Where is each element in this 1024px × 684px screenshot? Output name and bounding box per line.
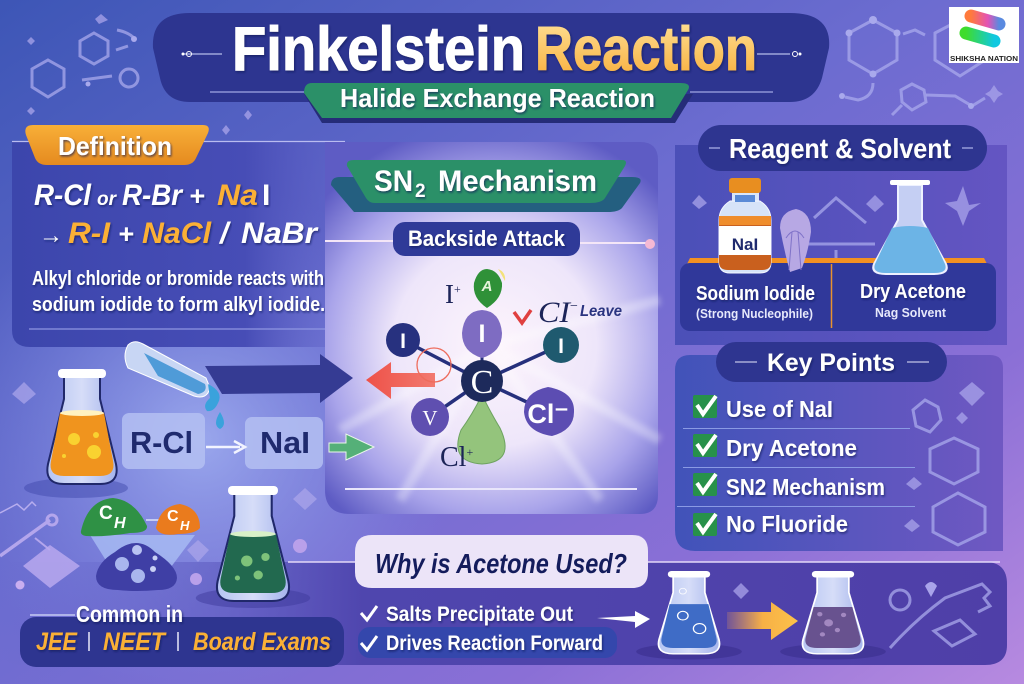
equation line 2: / (218, 217, 231, 250)
leaving group drop (458, 395, 505, 464)
icon: NaI bottle (719, 178, 771, 273)
reagent heading pill: Reagent & Solvent (729, 133, 951, 164)
title banner (153, 13, 829, 102)
subtitle text: Halide Exchange Reaction (340, 83, 655, 113)
NaI box: NaI (260, 425, 310, 460)
equation line 1: R-Br (122, 179, 184, 212)
green A drop: A (481, 278, 492, 295)
label I+: I (445, 279, 454, 309)
icon: orange flask (24, 369, 128, 498)
equation line 1 (34, 179, 270, 212)
icon: pale crystal (780, 209, 811, 272)
backside attack pill: Backside Attack (408, 226, 566, 251)
item: SN2 mechanism: SN2 Mechanism (726, 474, 885, 500)
equation line 1: + (189, 181, 205, 211)
orange CH atom: C (167, 508, 179, 525)
label I+: + (454, 282, 461, 296)
SN2 ribbon: 2 (415, 181, 426, 202)
equation line 2: NaCl (142, 217, 212, 250)
item: dry acetone: Dry Acetone (726, 435, 857, 461)
why acetone pill: Why is Acetone Used? (375, 548, 627, 579)
decoration in panel (692, 186, 981, 260)
orange strip (687, 258, 987, 264)
atom left (386, 323, 420, 357)
decoration: molecules top right (839, 16, 1003, 115)
decoration: bottom right (733, 582, 990, 648)
exam names: NEET (103, 628, 168, 656)
logo text: SHIKSHA NATION (950, 54, 1018, 63)
why acetone points: Drives Reaction Forward (386, 632, 603, 655)
NaI box (245, 417, 323, 469)
panel: why acetone band (0, 562, 1007, 665)
panel: reagent and solvent (675, 125, 1007, 345)
SN2 ribbon: SN (374, 165, 413, 198)
panel: definition (12, 125, 345, 347)
decoration in key points (904, 382, 985, 545)
key points heading pill (716, 342, 947, 382)
green CH atom: H (114, 515, 126, 532)
SN2 ribbon (331, 160, 641, 212)
atom V: V (422, 406, 438, 430)
green A drop (474, 269, 505, 308)
equation line 2: + (118, 219, 134, 249)
equation line 2: → (39, 222, 63, 249)
labels panel: Sodium Iodide (696, 283, 815, 305)
green arrow (329, 434, 374, 460)
definition tag (25, 125, 209, 165)
atom right: I (558, 335, 564, 358)
item: use of NaI: Use of NaI (726, 396, 833, 422)
title accent word: Reaction (535, 15, 757, 84)
equation line 1: R-Cl (34, 179, 92, 212)
atom top: I (479, 320, 485, 348)
decoration: molecules top left (27, 14, 252, 135)
labels panel: Nag Solvent (875, 306, 947, 320)
R-Cl box: R-Cl (130, 425, 193, 460)
gold arrow (727, 602, 798, 640)
green CH atom (81, 498, 147, 536)
equation line 1: Na (217, 179, 258, 212)
label Cl- leave (538, 296, 622, 329)
equation line 1: I (262, 179, 270, 212)
definition description: sodium iodide to form alkyl iodide. (32, 293, 325, 316)
icon: blue flask (636, 571, 742, 660)
R-Cl box (122, 413, 205, 469)
equation line 2 (39, 217, 319, 250)
carbon atom: C (471, 364, 493, 401)
title text: Finkelstein (232, 15, 525, 84)
label Cl- leave: CI (538, 296, 572, 329)
white arrow (597, 611, 650, 628)
why acetone points (358, 603, 617, 658)
logo (949, 7, 1019, 63)
atom top (462, 310, 502, 358)
icon: NaI bottle: NaI (732, 235, 758, 254)
carbon atom (461, 360, 503, 402)
icon: green flask (196, 486, 310, 608)
icon: test tube (125, 342, 224, 429)
definition description: Alkyl chloride or bromide reacts with (32, 267, 324, 290)
labels panel: Dry Acetone (860, 281, 966, 303)
panel: key points (675, 342, 1003, 551)
subtitle ribbon (210, 83, 773, 123)
equation line 2: R-I (68, 217, 111, 250)
atom right (543, 327, 579, 363)
SN2 ribbon: Mechanism (438, 165, 597, 198)
panel: SN2 mechanism (325, 142, 660, 514)
label Cl+: Cl (440, 442, 466, 473)
atom Cl minus (524, 387, 574, 436)
why acetone pill (355, 535, 648, 588)
label Cl- leave: Leave (580, 303, 622, 320)
item: no fluoride: No Fluoride (726, 511, 848, 537)
icon: acetone flask (873, 180, 947, 274)
equation line 1: or (97, 189, 118, 210)
labels panel (680, 263, 996, 331)
icon: CH atoms and mound (81, 498, 200, 591)
small reaction arrow (206, 441, 245, 453)
green CH atom: C (99, 503, 113, 524)
labels panel: (Strong Nucleophile) (696, 307, 813, 321)
exam names: JEE (36, 628, 78, 656)
common in label: Common in (76, 601, 183, 627)
why acetone points: Salts Precipitate Out (386, 603, 573, 626)
atom left: I (400, 330, 406, 353)
exam band (20, 601, 344, 667)
icon: purple flask (780, 571, 886, 660)
equation line 2: NaBr (241, 217, 319, 250)
molecule diagram (366, 269, 622, 473)
big reaction arrow (205, 354, 353, 403)
red check (514, 310, 531, 323)
decoration: lower left (0, 382, 317, 590)
label Cl- leave: − (570, 299, 578, 314)
exam names: Board Exams (193, 628, 331, 656)
mound (96, 543, 177, 591)
orange CH atom (156, 504, 200, 535)
atom Cl minus: Cl⁻ (527, 399, 569, 429)
reagent heading pill (698, 125, 987, 171)
label Cl+: + (466, 445, 473, 459)
key points heading pill: Key Points (767, 349, 895, 377)
definition tag: Definition (58, 131, 172, 161)
orange CH atom: H (180, 518, 190, 533)
red arrow (366, 362, 435, 399)
definition description (32, 267, 325, 316)
backside attack pill (325, 222, 655, 256)
atom V (411, 398, 449, 436)
exam names (36, 628, 331, 656)
